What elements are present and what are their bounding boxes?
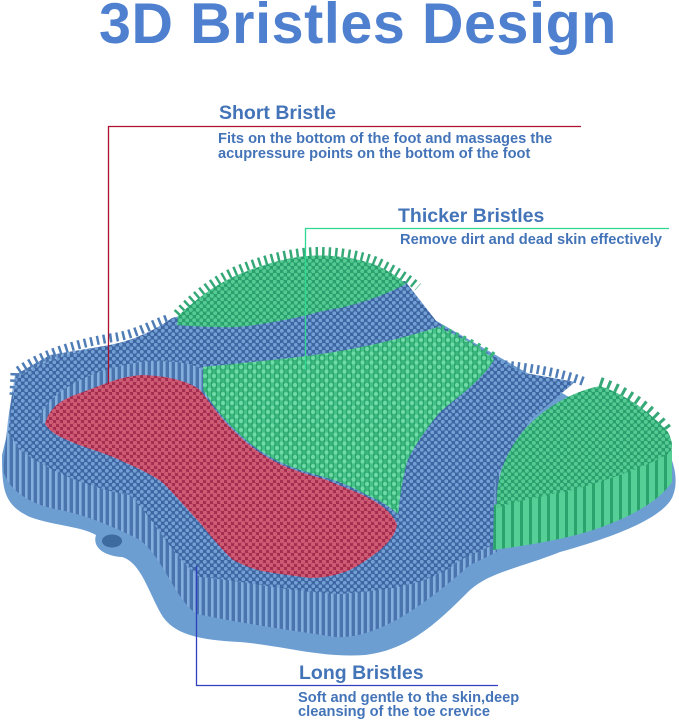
callout: thicker bristles text: Remove dirt and dead skin effectively xyxy=(400,232,663,248)
base plate xyxy=(2,300,676,655)
callout: short bristle text xyxy=(218,102,552,162)
top green bristles xyxy=(177,255,406,327)
thick green centre bristles xyxy=(203,327,494,514)
leader line: thicker bristles xyxy=(306,228,669,370)
callout: thicker bristles text xyxy=(398,205,663,248)
callout: long bristles text xyxy=(298,662,519,720)
callout: thicker bristles text: Thicker Bristles xyxy=(398,205,544,227)
right green bristle tops xyxy=(497,386,672,508)
callout: short bristle text: Fits on the bottom of the foot and massages the xyxy=(218,131,552,147)
base plate hole xyxy=(102,534,122,548)
thicker green fringe xyxy=(440,330,493,358)
product: bristle mat xyxy=(2,251,676,655)
blue bristle tops: left and front xyxy=(8,281,575,594)
callout: long bristles text: cleansing of the toe crevice xyxy=(298,704,490,720)
right green bristle side wall xyxy=(493,450,672,550)
callout: short bristle text: acupressure points on the bottom of the foot xyxy=(218,146,530,162)
top edge fringe: blue xyxy=(14,318,585,395)
leader line: long bristles xyxy=(196,566,498,686)
short red bristles xyxy=(45,375,397,578)
hump fringe: green xyxy=(177,251,418,314)
inner wall around red zone xyxy=(38,361,215,430)
thicker bristles fringe: blue-to-green right xyxy=(600,382,669,432)
callout: long bristles text: Soft and gentle to the skin,deep xyxy=(298,690,519,706)
callout: short bristle text: Short Bristle xyxy=(219,102,336,124)
leader line: short bristle xyxy=(108,126,581,384)
long blue bristles: side walls xyxy=(3,330,520,637)
callout: long bristles text: Long Bristles xyxy=(299,662,424,684)
